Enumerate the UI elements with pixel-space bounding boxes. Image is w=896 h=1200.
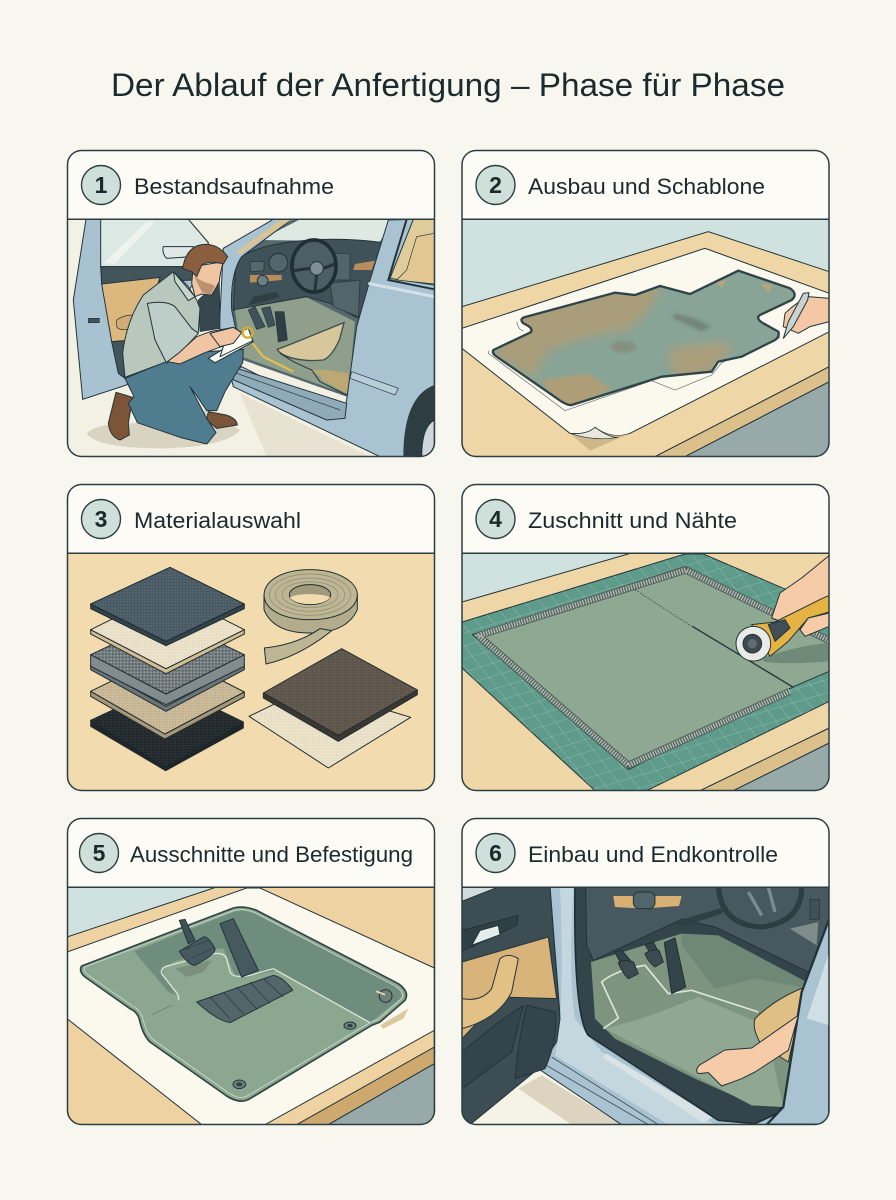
writing hand: [210, 327, 242, 347]
cream felt sample: [90, 618, 245, 674]
panel 6 header: [462, 818, 830, 1126]
head: [192, 262, 223, 297]
tape measure: [253, 343, 293, 372]
brown carpet sample: [263, 649, 417, 741]
rear boot: [108, 392, 133, 440]
green carpet piece: [472, 566, 829, 770]
pedals: [615, 938, 686, 994]
jeans: [125, 349, 243, 444]
stitched seam border: [478, 570, 829, 765]
panel 6: Einbau und Endkontrolle: [462, 818, 830, 1126]
panel outlines: [68, 150, 829, 1124]
clipboard: [208, 341, 254, 364]
panel 2 header: [462, 150, 830, 458]
illustration: installed mat in car: [462, 887, 829, 1125]
illustration: floor mat with cutouts: [67, 887, 434, 1125]
car side right: [219, 219, 434, 457]
door: [462, 887, 560, 1125]
folded old carpet: [277, 323, 344, 361]
panel 4 header: 4: [489, 506, 502, 532]
template paper: [462, 248, 829, 436]
title: Der Ablauf der Anfertigung – Phase für Phase: [111, 67, 785, 103]
fabric backing sample: [249, 701, 411, 768]
panel 5 header: [68, 818, 434, 1126]
panel 1 header: [68, 150, 434, 458]
panel 1 header: Bestandsaufnahme: [134, 174, 334, 199]
man: [108, 244, 253, 444]
forearm: [167, 327, 242, 364]
panel 6 header: 6: [489, 840, 502, 866]
green floor mat: [591, 934, 807, 1107]
pedals and heel pad: [179, 919, 293, 1023]
car sill and pillar: [538, 887, 829, 1125]
panel 2 header: 2: [489, 172, 502, 198]
grey loop pile sample: [90, 644, 245, 712]
panel 4 header: [462, 484, 830, 792]
cut line: [635, 590, 692, 626]
panel 5 header: Ausschnitte und Befestigung: [130, 842, 413, 867]
worn patches: [492, 280, 773, 410]
panel 3: Materialauswahl: [67, 484, 434, 792]
dark blue carpet sample: [91, 567, 244, 646]
illustration: cutting carpet on mat: [462, 553, 829, 791]
black underlay sample: [90, 710, 244, 772]
floor shadow: [87, 410, 240, 448]
illustration: material samples: [67, 553, 434, 791]
open car door: [73, 219, 208, 399]
illustration: carpet template on table: [462, 219, 829, 457]
interior: [575, 887, 829, 1124]
panel 4 header: Zuschnitt und Nähte: [528, 508, 737, 533]
illustration: man inspecting car floor: [67, 219, 434, 457]
tape roll: [264, 570, 357, 664]
panel 3 header: 3: [95, 506, 107, 532]
door sill right pillar: [767, 919, 829, 1125]
panel 1: Bestandsaufnahme: [67, 150, 434, 458]
panel 2 header: Ausbau und Schablone: [528, 174, 765, 199]
panel 3 header: Materialauswahl: [134, 508, 301, 533]
tan felt sample: [90, 681, 245, 739]
floor carpet and pedals: [235, 297, 355, 395]
hand: [697, 1015, 798, 1086]
panel 3 header: [68, 484, 434, 792]
cutting mat: [462, 554, 829, 791]
front boot: [207, 412, 237, 428]
shirt: [123, 272, 200, 377]
template pencil line: [488, 337, 780, 411]
panel 6 header: Einbau und Endkontrolle: [528, 842, 778, 867]
panel 5 header: 5: [93, 840, 106, 866]
panel 2: Ausbau und Schablone: [462, 150, 830, 458]
hand with pen: [783, 293, 829, 338]
white board: [67, 888, 434, 1125]
fixing clips: [233, 990, 392, 1089]
fitted mat: [81, 907, 406, 1101]
panel 4: Zuschnitt und Nähte: [462, 484, 830, 792]
seat: [754, 987, 805, 1062]
rotary cutter and hand: [736, 555, 829, 661]
raised darker area: [134, 911, 401, 1023]
old worn carpet: [493, 271, 795, 405]
car interior: [227, 219, 393, 397]
wheel: [403, 385, 434, 457]
door jamb seal: [198, 280, 220, 332]
panel 5: Ausschnitte und Befestigung: [67, 818, 434, 1126]
panel 1 header: 1: [95, 172, 108, 198]
